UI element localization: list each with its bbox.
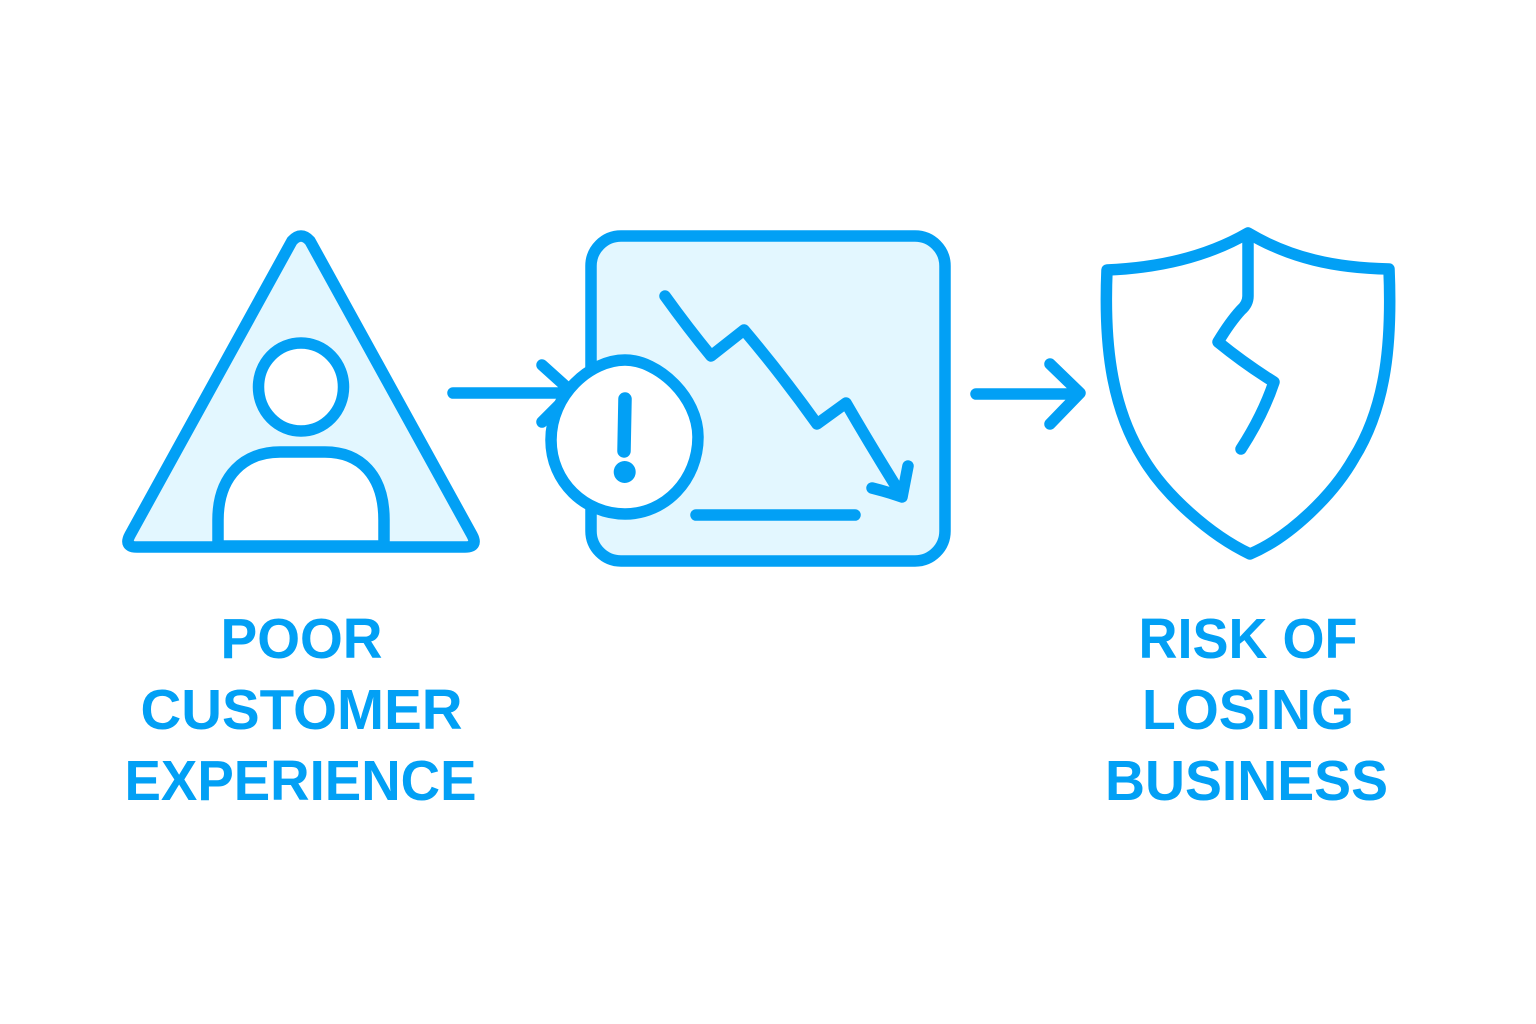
- icon: customer in warning triangle: [128, 236, 474, 547]
- label: poor customer experience: [124, 607, 476, 813]
- label: risk of losing business: [1105, 607, 1388, 813]
- label: risk of losing business: RISK OF: [1138, 607, 1358, 671]
- arrow: chart to shield: [976, 364, 1080, 424]
- label: poor customer experience: CUSTOMER: [140, 678, 462, 742]
- label: risk of losing business: LOSING: [1142, 678, 1354, 742]
- label: poor customer experience: POOR: [220, 607, 382, 671]
- icon: cracked shield: [1106, 233, 1390, 554]
- label: poor customer experience: EXPERIENCE: [124, 749, 476, 813]
- label: risk of losing business: BUSINESS: [1105, 749, 1388, 813]
- baseline bar: [696, 509, 855, 521]
- arrow: customer to chart: [453, 365, 572, 422]
- icon: alert bubble: [551, 360, 698, 514]
- icon: declining chart panel: [591, 236, 945, 561]
- chart: falling trend line with arrow: [665, 296, 908, 497]
